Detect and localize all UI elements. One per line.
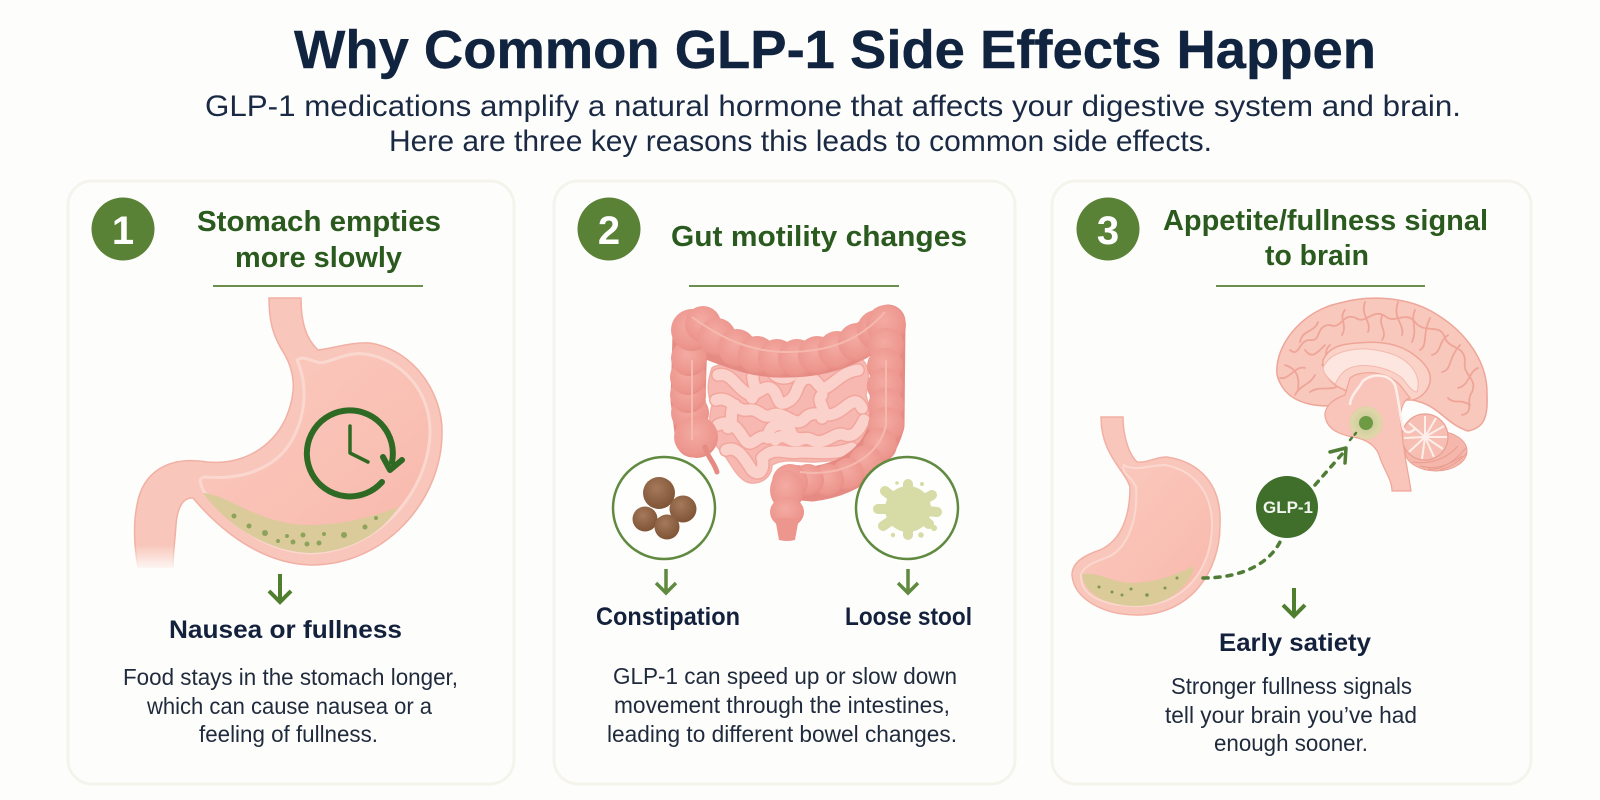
description: tell your brain you’ve had [1165, 702, 1417, 728]
arrow to constipation [656, 569, 676, 593]
cerebellum [1402, 414, 1467, 471]
heading [197, 206, 441, 274]
description [123, 664, 458, 747]
number badge 2 [578, 198, 640, 260]
stomach illustration with clock [125, 298, 442, 571]
description: movement through the intestines, [614, 692, 950, 718]
description: GLP-1 can speed up or slow down [613, 663, 957, 689]
heading [1163, 205, 1488, 272]
description: enough sooner. [1214, 730, 1368, 756]
number badge 2: 2 [598, 209, 620, 253]
description: Food stays in the stomach longer, [123, 664, 458, 690]
result: Nausea or fullness [169, 616, 402, 644]
arrow down [269, 574, 291, 602]
result: loose stool: Loose stool [845, 603, 972, 631]
heading: more slowly [235, 242, 402, 274]
title: Why Common GLP-1 Side Effects Happen [294, 20, 1376, 80]
heading: Appetite/fullness signal [1163, 205, 1488, 237]
cerebrum [1277, 298, 1487, 431]
icon: loose stool splat [856, 457, 958, 559]
description [1165, 673, 1417, 756]
arrow down [1283, 588, 1305, 616]
heading: to brain [1265, 240, 1369, 272]
dotted signal path [1203, 433, 1356, 578]
panel: appetite/fullness signal to brain [1052, 181, 1531, 784]
subtitle [205, 90, 1461, 158]
subtitle: Here are three key reasons this leads to common side effects. [389, 125, 1212, 158]
description: leading to different bowel changes. [607, 721, 957, 747]
panel: gut motility changes [554, 181, 1015, 784]
GLP-1 badge [1256, 476, 1318, 538]
subtitle: GLP-1 medications amplify a natural hormone that affects your digestive system and brain. [205, 90, 1461, 123]
heading: Stomach empties [197, 206, 441, 238]
number badge 1: 1 [112, 209, 134, 253]
small stomach illustration [1072, 417, 1220, 615]
number badge 3: 3 [1097, 209, 1119, 253]
panel: stomach empties more slowly [68, 181, 514, 784]
heading: Gut motility changes [671, 221, 967, 253]
large intestine [670, 305, 906, 541]
brain illustration [1277, 298, 1487, 491]
cingulate gyrus [1323, 342, 1430, 400]
arrow to loose stool [898, 569, 918, 593]
hypothalamus highlight [1350, 407, 1382, 439]
description: which can cause nausea or a [146, 693, 433, 719]
gyri [1280, 302, 1478, 415]
result: Early satiety [1219, 629, 1371, 657]
small intestine [708, 358, 869, 483]
corpus callosum [1323, 349, 1418, 392]
number badge 3 [1076, 198, 1140, 260]
result: constipation: Constipation [596, 603, 740, 631]
description: Stronger fullness signals [1171, 673, 1412, 699]
diencephalon and brainstem [1325, 373, 1411, 491]
icon: clock [307, 410, 402, 496]
number badge 1 [92, 198, 154, 260]
icon: constipation pellets [613, 457, 715, 559]
description: feeling of fullness. [199, 721, 378, 747]
intestines illustration [670, 305, 906, 541]
description [607, 663, 957, 747]
GLP-1 badge: GLP-1 [1263, 498, 1313, 517]
